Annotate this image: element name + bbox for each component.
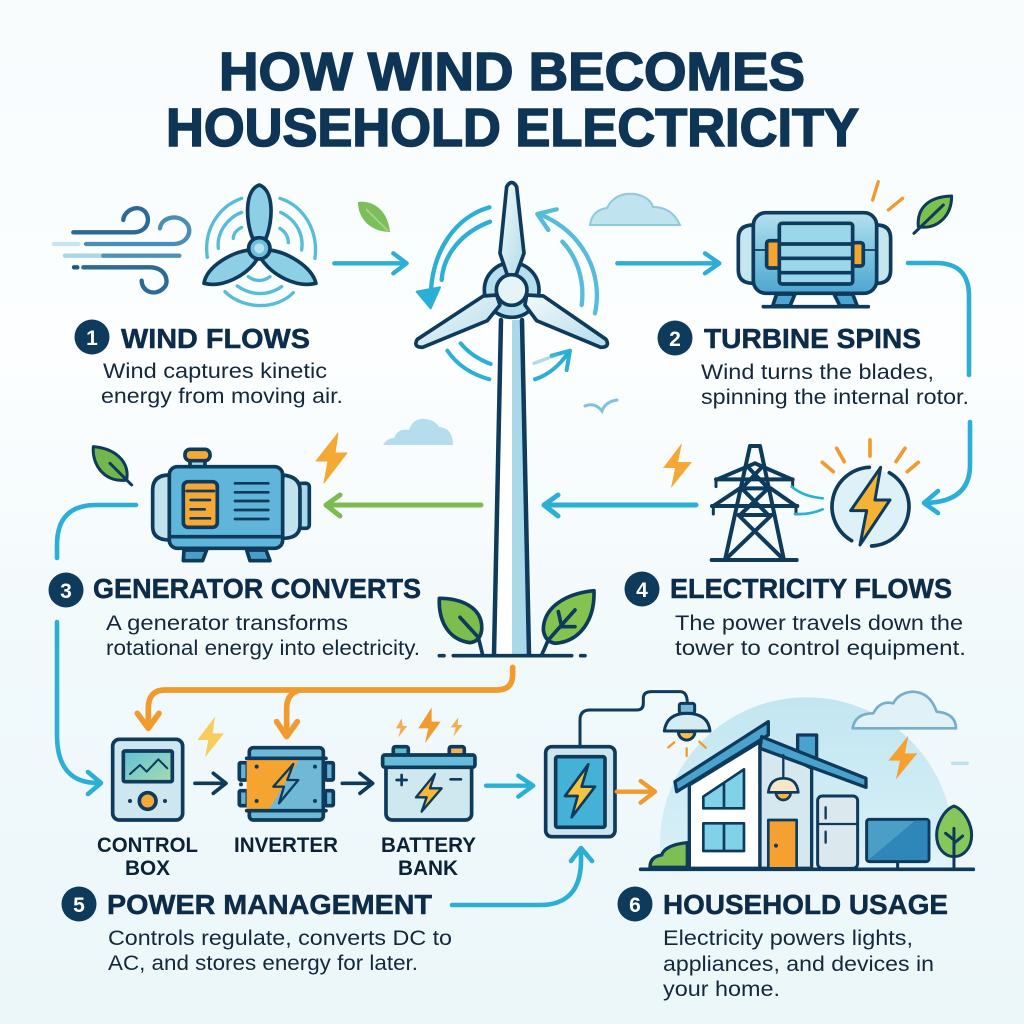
- label: control box: BOX: [125, 857, 170, 880]
- heading: power management: POWER MANAGEMENT: [107, 889, 432, 920]
- label: control box: CONTROL: [97, 834, 198, 857]
- label: battery bank: BANK: [398, 857, 458, 880]
- badge: 6: [618, 886, 652, 922]
- badge: 1: 1: [86, 327, 98, 350]
- text: generator converts description: A generator transforms: [106, 612, 348, 635]
- icon: generator: [153, 449, 309, 561]
- icon: transmission wires: [792, 487, 823, 514]
- text: household usage description: your home.: [663, 978, 780, 1001]
- icon: hanging lamp: [664, 703, 710, 756]
- arrow: control box to inverter: [195, 773, 226, 793]
- arrow: battery to panel: [486, 776, 533, 797]
- text: generator converts description: rotational energy into electricity.: [106, 637, 420, 660]
- icon: battery: [383, 707, 475, 820]
- label: control box: [97, 834, 198, 880]
- heading: wind flows: WIND FLOWS: [121, 323, 310, 354]
- badge: 5: 5: [73, 894, 85, 917]
- badge: 2: 2: [669, 328, 681, 351]
- arrow: tower to generator: [326, 495, 481, 516]
- text: electricity flows description: The power travels down the: [675, 612, 963, 635]
- icon: wind gusts: [54, 208, 189, 292]
- rotation arrows around turbine: [417, 207, 597, 379]
- icon: electric bolt in circle with rays: [822, 440, 918, 546]
- panel: step 2 turbine spins: [658, 182, 969, 409]
- badge: 3: [48, 572, 84, 608]
- text: household usage description: [663, 927, 934, 1001]
- text: turbine spins description: spinning the internal rotor.: [701, 386, 969, 409]
- arrow: turbine to nacelle: [617, 253, 719, 273]
- label: battery bank: BATTERY: [381, 834, 476, 857]
- heading: electricity flows: ELECTRICITY FLOWS: [670, 573, 952, 604]
- badge: 2: [658, 320, 692, 356]
- badge: 4: 4: [636, 579, 648, 602]
- icon: green leaf: [914, 196, 952, 233]
- panel: step 1 wind flows: [54, 185, 343, 408]
- heading: turbine spins: TURBINE SPINS: [704, 323, 921, 354]
- badge: 6: 6: [629, 894, 641, 917]
- title: HOUSEHOLD ELECTRICITY: [166, 98, 859, 158]
- arrow: power management to panel: [452, 848, 592, 905]
- text: power management description: AC, and stores energy for later.: [108, 952, 418, 975]
- arrow: panel to house: [617, 781, 655, 803]
- badge: 4: [624, 572, 660, 606]
- text: generator converts description: [106, 612, 420, 660]
- icon: orange bolt: [663, 443, 692, 488]
- text: household usage description: Electricity powers lights,: [663, 927, 913, 950]
- text: power management description: Controls regulate, converts DC to: [108, 927, 452, 950]
- text: power management description: [108, 927, 452, 975]
- icon: cloud with bolt: [853, 692, 967, 779]
- icon: green leaf: [93, 447, 132, 485]
- title: [166, 42, 859, 158]
- icon: transmission tower: [712, 446, 797, 560]
- decor: bird: [585, 400, 617, 411]
- heading: household usage: HOUSEHOLD USAGE: [663, 889, 948, 920]
- decor: mid cloud: [383, 419, 453, 445]
- panel: step 5 power management: [62, 707, 476, 975]
- label: inverter: INVERTER: [234, 834, 338, 857]
- text: turbine spins description: [701, 361, 969, 409]
- panel: step 6 household usage: [546, 692, 973, 1001]
- badge: 5: [62, 886, 96, 922]
- text: wind flows description: [101, 360, 343, 408]
- label: battery bank: [381, 834, 476, 880]
- arrow: inverter to battery: [342, 773, 373, 793]
- arrow: electricity to tower: [544, 495, 696, 516]
- icon: fridge: [818, 796, 858, 868]
- icon: television: [867, 819, 929, 868]
- text: electricity flows description: tower to control equipment.: [675, 637, 966, 660]
- heading: generator converts: GENERATOR CONVERTS: [93, 573, 421, 604]
- arrow: tower base to power management: [137, 667, 513, 737]
- icon: yellow bolt: [197, 717, 224, 757]
- icon: house scene background: [660, 697, 953, 870]
- badge: 1: [74, 320, 110, 354]
- text: turbine spins description: Wind turns the blades,: [701, 361, 934, 384]
- arrow: generator to control box: [57, 505, 136, 794]
- icon: orange bolt near generator: [316, 433, 347, 483]
- text: wind flows description: energy from moving air.: [101, 385, 343, 408]
- icon: top cloud: [590, 194, 680, 225]
- badge: 3: 3: [60, 580, 72, 603]
- central wind turbine: [416, 182, 607, 655]
- icon: base leaves and ground line: [439, 591, 594, 656]
- icon: top leaf: [358, 202, 390, 232]
- text: electricity flows description: [675, 612, 966, 660]
- icon: distribution panel: [546, 692, 687, 837]
- icon: inverter: [239, 748, 333, 820]
- text: wind flows description: Wind captures kinetic: [103, 360, 327, 383]
- panel: step 4 electricity flows: [624, 440, 966, 660]
- arrow: wind to turbine: [334, 253, 407, 273]
- arrow: turbine to electricity: [908, 263, 970, 513]
- icon: house: [650, 722, 866, 868]
- text: household usage description: appliances, and devices in: [663, 953, 934, 976]
- icon: small turbine with wind rings: [204, 185, 316, 306]
- title: HOW WIND BECOMES: [219, 42, 805, 102]
- icon: tree: [937, 806, 972, 868]
- icon: rotor housing: [738, 182, 903, 307]
- panel: step 3 generator converts: [48, 447, 421, 660]
- ground line: [641, 864, 973, 875]
- icon: control box: [113, 739, 183, 820]
